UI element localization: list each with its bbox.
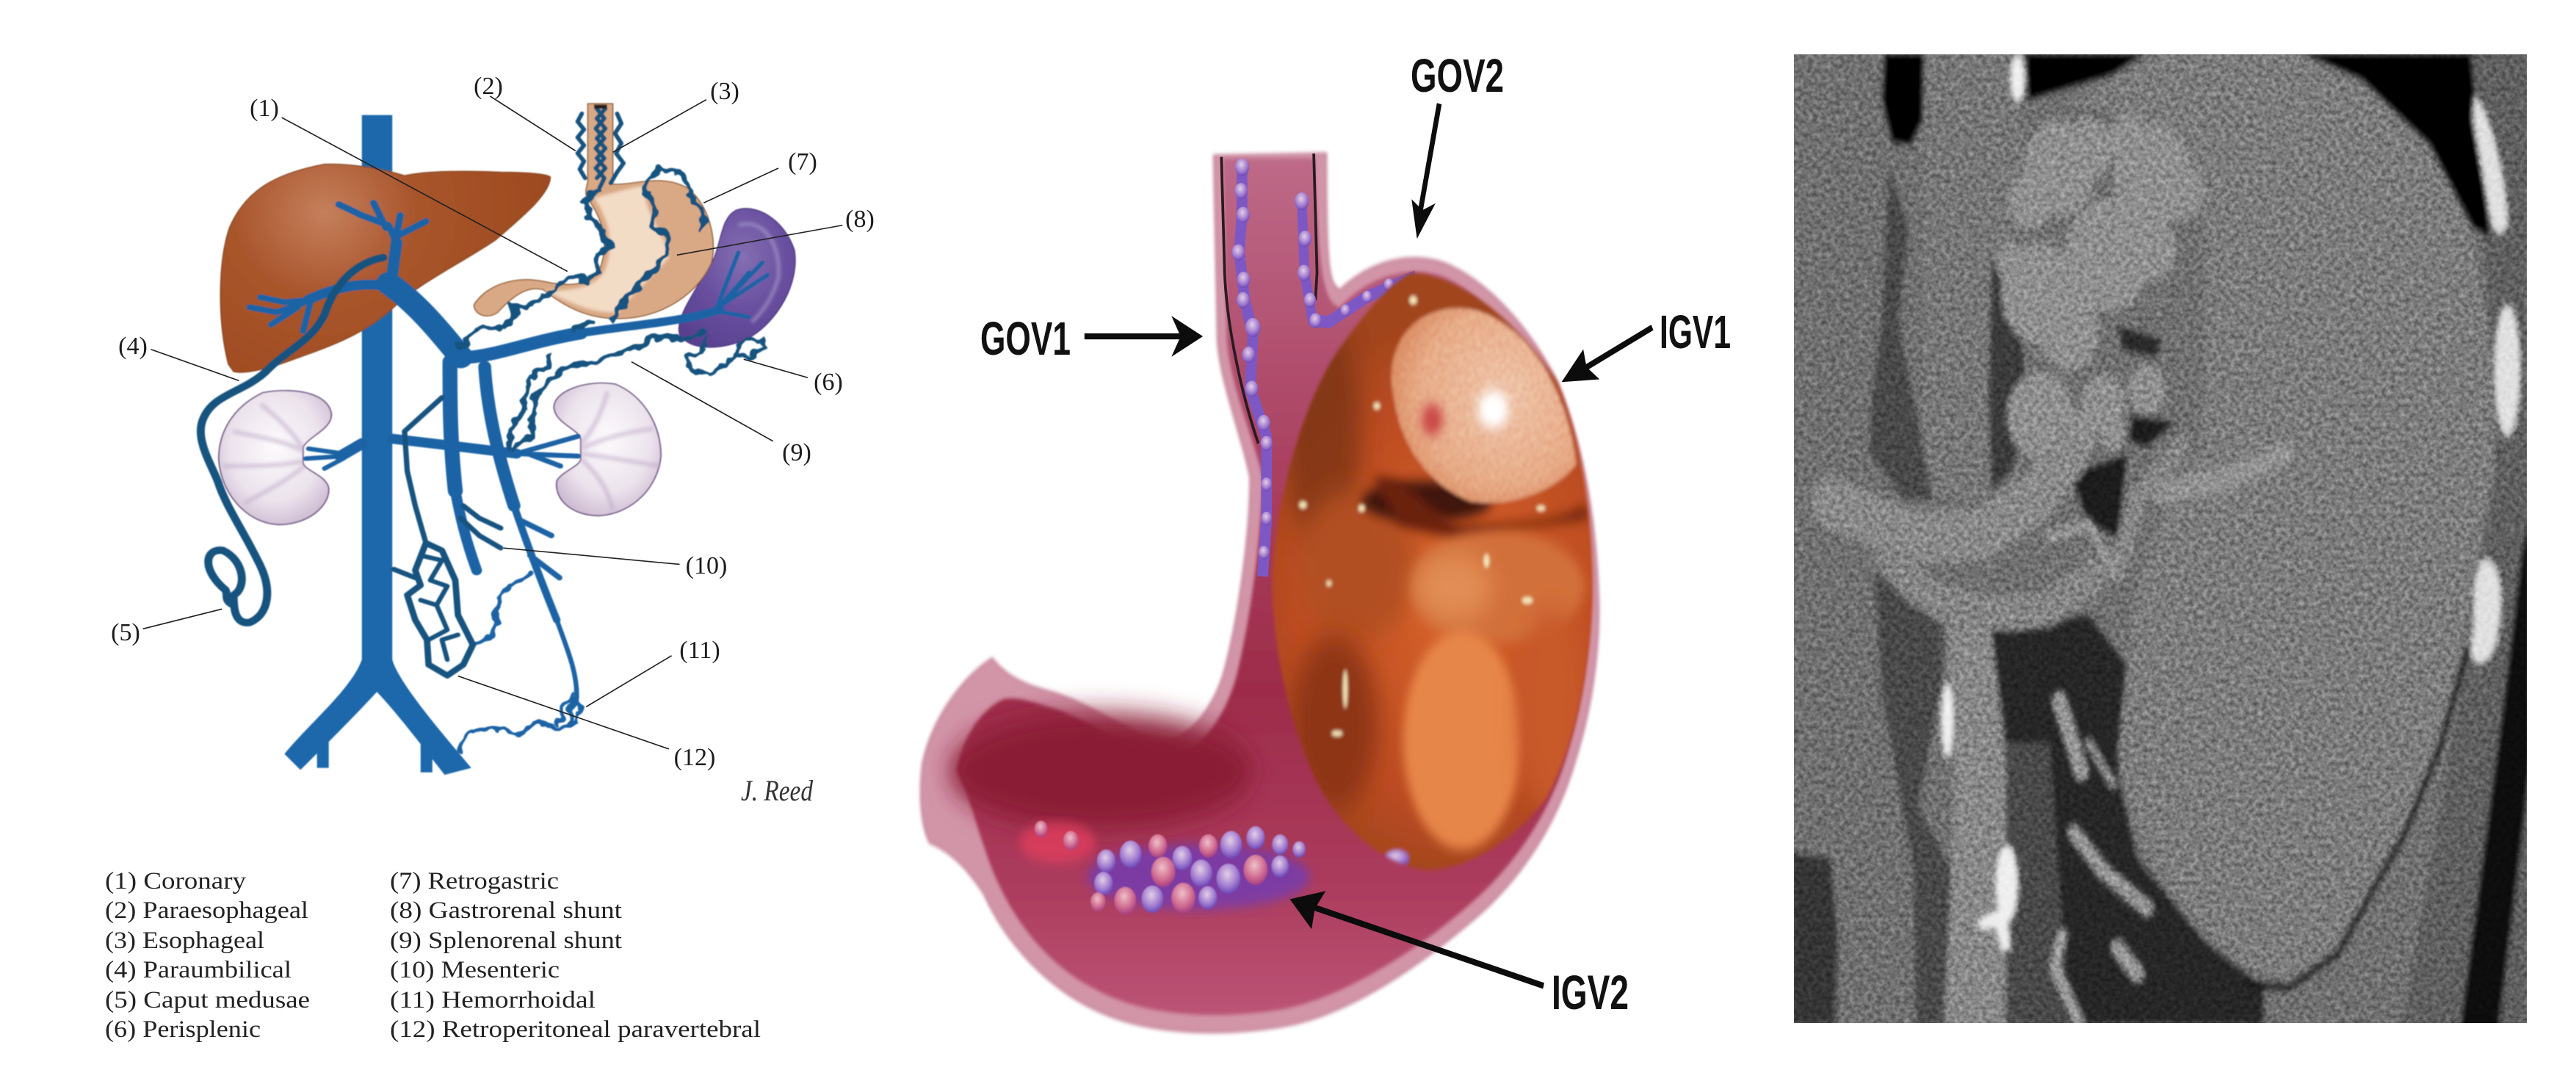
- CT spleen: [2069, 54, 2495, 982]
- legend: (5) Caput medusae: [105, 987, 310, 1013]
- panel: portosystemic collateral diagram: [105, 73, 875, 1043]
- anatomical illustration: [200, 104, 795, 775]
- numbered labels: (5): [111, 619, 140, 646]
- CT lung air: [2025, 53, 2147, 101]
- CT varices cluster: [1996, 114, 2203, 459]
- caption IGV2: IGV2: [1552, 965, 1629, 1019]
- collateral: gastrorenal shunt: [509, 325, 594, 447]
- CT splenic hilum enhancement: [2162, 454, 2284, 493]
- numbered labels: (12): [674, 744, 715, 771]
- portal venous system: [250, 203, 767, 699]
- collateral: oesophageal and paraoesophageal: [578, 104, 623, 188]
- arrow GOV2: [1411, 104, 1439, 239]
- caption GOV2: GOV2: [1411, 49, 1504, 102]
- CT image noise: [1794, 54, 2527, 1023]
- CT tissue layers: [1794, 54, 2527, 1023]
- numbered labels: (10): [686, 552, 727, 579]
- CT background soft tissue: [1794, 54, 2500, 1023]
- leader lines: [143, 96, 842, 749]
- CT trachea: [1882, 53, 1924, 146]
- panel: coronal CT image: [1794, 54, 2527, 1023]
- CT calcifications: [1942, 55, 2025, 951]
- stomach outer wall: [921, 153, 1599, 1033]
- legend: (4) Paraumbilical: [105, 957, 292, 983]
- CT black outer stripe: [2459, 518, 2527, 1023]
- CT lower vessels: [2055, 701, 2147, 1022]
- numbered labels: [111, 73, 875, 771]
- arrow GOV1: [1085, 316, 1203, 357]
- CT ribs: [2471, 98, 2520, 663]
- legend: (3) Esophageal: [105, 928, 264, 954]
- stomach and oesophagus: [474, 104, 713, 319]
- numbered labels: (3): [710, 78, 739, 105]
- CT mediastinal fat: [1792, 165, 2264, 1025]
- collateral: coronary: [460, 188, 609, 346]
- numbered labels: (7): [788, 148, 817, 176]
- CT vessels near hilum: [2118, 447, 2181, 569]
- collateral: retrogastric: [613, 168, 703, 319]
- numbered labels: (4): [118, 333, 148, 360]
- legend: (2) Paraesophageal: [105, 897, 308, 924]
- CT upper central tissue: [1923, 49, 2021, 499]
- liver: [220, 164, 550, 372]
- numbered labels: (1): [250, 95, 279, 122]
- legend: (1) Coronary: [105, 868, 247, 894]
- arrow IGV2: [1290, 891, 1544, 986]
- numbered labels: (6): [814, 369, 843, 396]
- CT dark rim below spleen: [2244, 646, 2468, 988]
- collateral: splenorenal shunt: [514, 331, 701, 449]
- legend: (6) Perisplenic: [105, 1016, 261, 1043]
- antrum shadow: [949, 713, 1253, 829]
- arrow IGV1: [1562, 328, 1652, 382]
- kidneys: [219, 383, 661, 524]
- stomach cavity: [957, 159, 1590, 1015]
- collateral: retroperitoneal plexus: [394, 397, 473, 676]
- spleen: [679, 209, 795, 347]
- collateral: hemorrhoidal: [459, 574, 579, 753]
- legend: (11) Hemorrhoidal: [390, 987, 596, 1013]
- collateral: paraumbilical and caput medusae: [200, 258, 383, 623]
- CT aorta: [1945, 627, 2006, 1025]
- numbered labels: (2): [474, 73, 503, 100]
- numbered labels: (8): [845, 206, 875, 233]
- legend: (12) Retroperitoneal paravertebral: [390, 1016, 761, 1043]
- inferior vena cava: [284, 115, 471, 775]
- artist signature: J. Reed: [741, 774, 814, 807]
- numbered labels: (9): [782, 439, 811, 466]
- CT chest wall band: [2403, 54, 2527, 1023]
- CT splenic vein confluence: [1831, 454, 2069, 538]
- legend: (8) Gastrorenal shunt: [390, 897, 622, 924]
- legend: (10) Mesenteric: [390, 957, 560, 983]
- CT right lung air: [2298, 53, 2490, 237]
- numbered labels: (11): [679, 637, 720, 664]
- legend: (9) Splenorenal shunt: [390, 928, 622, 954]
- legend: (7) Retrogastric: [390, 868, 559, 894]
- collateral: perisplenic: [687, 337, 765, 376]
- panel: gastric varices classification: [921, 49, 1731, 1033]
- stomach illustration: [921, 104, 1652, 1033]
- caption GOV1: GOV1: [980, 312, 1071, 365]
- legend: [105, 868, 761, 1043]
- endoscopic view of fundal varices IGV1: [1264, 259, 1601, 880]
- varices IGV2: [1019, 821, 1310, 914]
- oesophageal wall lines: [1221, 153, 1317, 444]
- caption IGV1: IGV1: [1660, 306, 1731, 358]
- wiggly collaterals group: [459, 168, 765, 753]
- varices GOV1: [1231, 159, 1273, 576]
- varices GOV2: [1295, 192, 1416, 328]
